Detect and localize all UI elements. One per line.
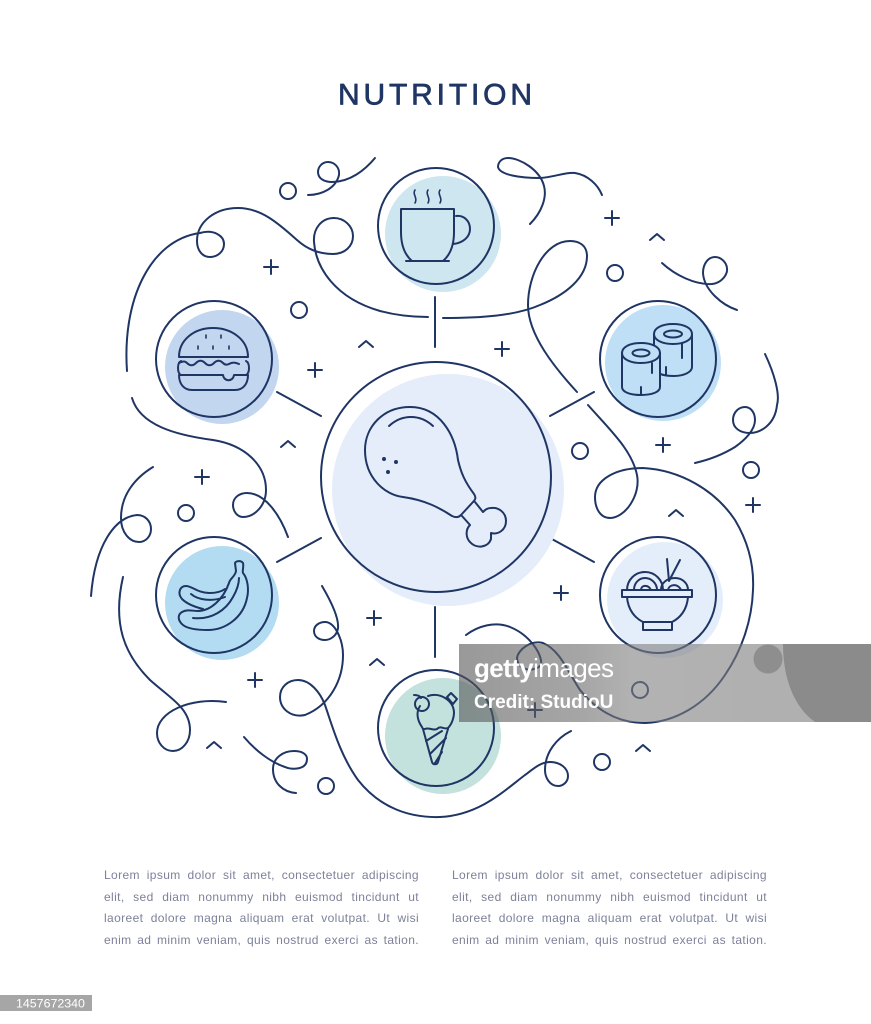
caret marks: [207, 234, 683, 751]
text block: right column: Lorem ipsum dolor sit amet, consectetuer adipiscing: [452, 868, 767, 882]
title: NUTRITION: [338, 78, 532, 112]
text block: left column: [104, 868, 419, 947]
icon: ice cream cone: [414, 693, 457, 764]
node: sushi rolls: [600, 301, 721, 421]
watermark band: [459, 644, 871, 722]
watermark credit: Credit: StudioU: [474, 692, 613, 713]
node: burger: [156, 301, 279, 424]
node: ice cream: [378, 670, 501, 794]
small ring marks: [178, 183, 759, 794]
center node: chicken drumstick: [321, 362, 564, 606]
text block: right column: [452, 868, 767, 947]
node: coffee cup: [378, 168, 501, 292]
text block: left column: elit, sed diam nonummy nibh euismod tincidunt ut: [104, 890, 419, 904]
text block: right column: enim ad minim veniam, quis nostrud exerci as tation.: [452, 933, 767, 947]
icon: coffee cup: [401, 190, 470, 261]
text block: left column: Lorem ipsum dolor sit amet, consectetuer adipiscing: [104, 868, 419, 882]
icon: sushi rolls: [622, 324, 692, 395]
node: bananas: [156, 537, 279, 660]
text block: right column: elit, sed diam nonummy nibh euismod tincidunt ut: [452, 890, 767, 904]
watermark logo text: gettyimages: [474, 653, 614, 683]
icon: noodle bowl: [622, 559, 692, 630]
decorative curves: [91, 158, 778, 817]
connector lines: [277, 297, 594, 657]
image id tag: [0, 995, 92, 1011]
node: noodle bowl: [600, 537, 723, 658]
text block: left column: enim ad minim veniam, quis nostrud exerci as tation.: [104, 933, 419, 947]
icon: drumstick: [365, 407, 506, 547]
text block: right column: laoreet dolore magna aliquam erat volutpat. Ut wisi: [452, 911, 767, 925]
icon: bananas: [179, 561, 248, 630]
plus signs: [195, 211, 760, 717]
image id tag: 1457672340: [16, 996, 85, 1010]
text block: left column: laoreet dolore magna aliquam erat volutpat. Ut wisi: [104, 911, 419, 925]
icon: burger: [178, 328, 249, 390]
